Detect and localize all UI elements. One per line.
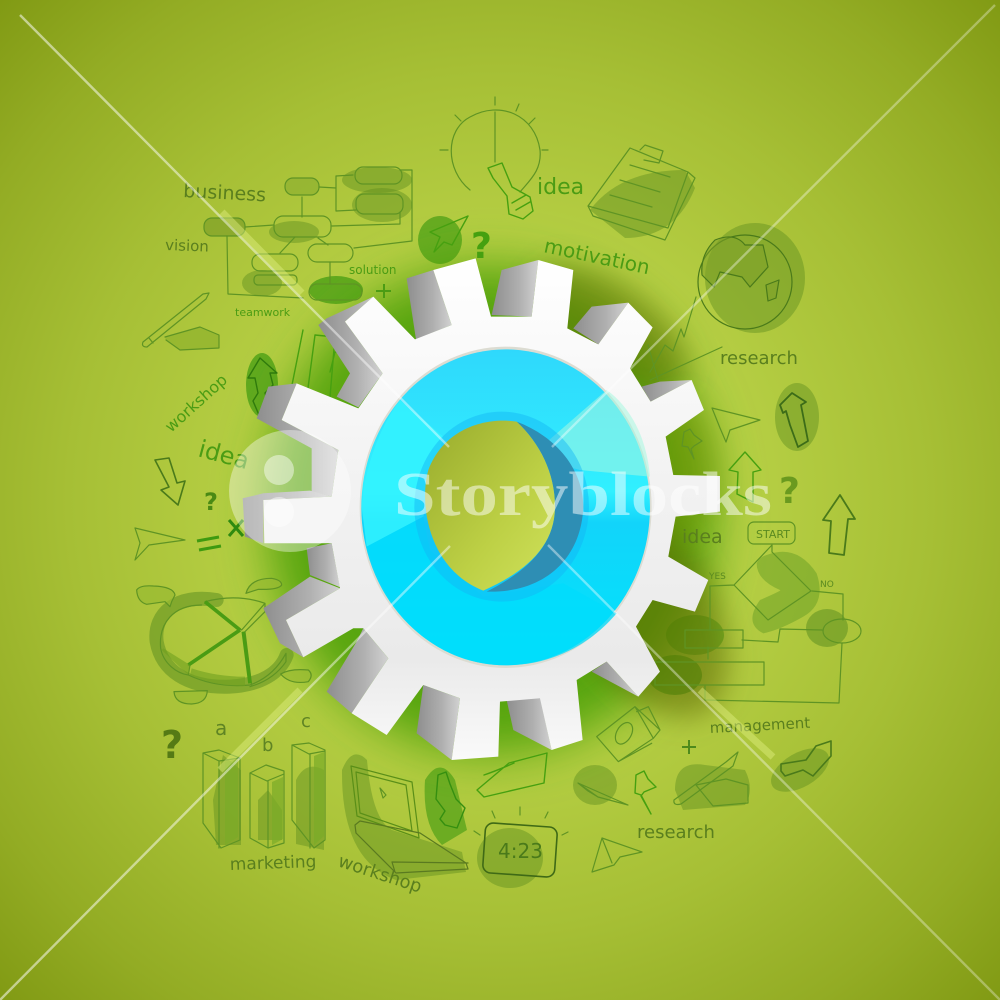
label: management: management [709,714,811,737]
icon: pushpin right [682,429,702,459]
icon: cross [229,520,243,536]
ring highlight [530,390,650,477]
label: marketing: marketing [229,852,317,875]
flowchart: start yes no: NO [820,580,834,590]
icon: curved arrow [436,772,465,828]
label: business: business [183,180,267,206]
icon: question right: ? [779,471,800,512]
gear 3D [243,258,720,760]
label: workshop left: workshop [161,370,231,436]
icon: book [477,753,547,797]
chart: pie sketch [137,578,311,704]
label: vision: vision [165,236,209,256]
watermark logo [229,430,351,552]
label: research bottom: research [637,822,715,843]
icon: arrow right curved [781,741,831,776]
gear side walls [243,260,692,760]
watermark text: Storyblocks [394,461,772,529]
icon: arrow up middle [729,452,761,502]
blue ring [361,349,650,665]
chart: bar sketch abc: c [301,711,311,732]
label: solution: solution [349,263,397,277]
flowchart: start yes no: YES [708,572,726,582]
label: motivation: motivation [542,233,652,279]
chart: bar sketch left [292,330,353,397]
chart: bar sketch abc: b [262,735,273,756]
icon: plane upper right [712,408,760,442]
icon: question mark: ? [471,226,492,267]
hole shadow wall [487,422,583,592]
label: idea right: idea [682,526,723,548]
icon: plus [376,284,391,298]
flowchart: business [204,167,412,300]
gear front face [263,258,720,760]
icon: plane middle [578,783,628,805]
chart: bar sketch abc [203,711,325,848]
icon: arrow curved right [780,393,808,447]
icon: plus lower [682,740,696,754]
icon: laptop [351,766,468,873]
icon: arrow down [155,458,185,505]
label: idea: idea [537,175,584,200]
icon: globe [698,235,792,329]
gear glow [265,242,766,755]
hole [425,421,555,591]
icon: question left: ? [204,488,218,516]
doodle blobs [213,167,836,888]
icon: arrow up right [823,495,855,555]
icon: pushpin [635,771,656,814]
icon: notepad [588,145,695,240]
label: idea left: idea [195,435,252,475]
label: workshop bottom: workshop [335,851,424,898]
flowchart: start yes no: START [756,528,790,541]
icon: alarm clock [474,807,568,877]
icon: alarm clock: 4:23 [498,839,543,863]
icon: plane left [135,528,185,560]
icon: plane bottom [592,838,642,872]
inner rim [414,412,589,602]
chart: line sketch [648,297,722,380]
icon: light bulb idea [440,97,548,219]
icon: paper plane blob [430,216,468,252]
icon: pencil right [674,752,748,806]
label: teamwork: teamwork [235,306,291,319]
blue ring rim [360,347,652,668]
icon: question bottom left: ? [161,723,183,767]
label: research top: research [720,348,798,369]
icon: equals [197,537,221,550]
icon: arrow up curved [248,358,277,415]
icon: coffee cup [597,707,660,762]
flowchart: start yes no [655,522,861,703]
chart: bar sketch abc: a [215,716,227,740]
icon: pencil and eraser [142,293,219,350]
